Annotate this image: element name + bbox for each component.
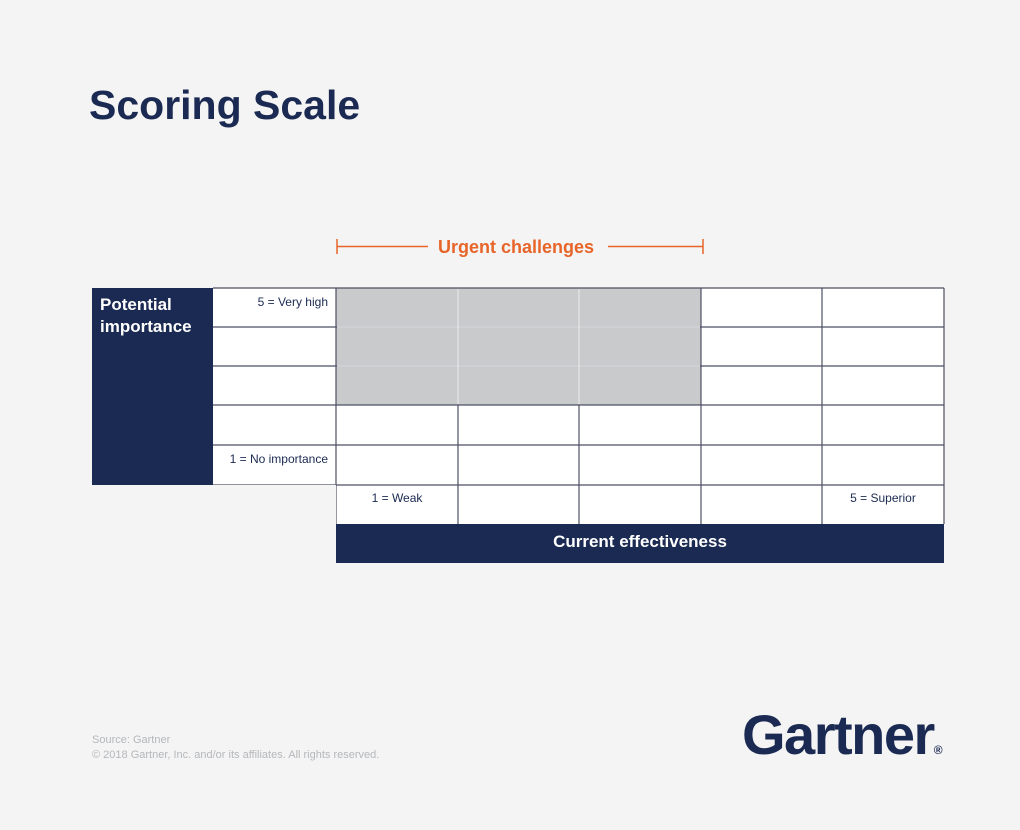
panel: potential importance <box>92 288 213 485</box>
axis labels <box>230 295 916 505</box>
urgent challenges bracket: Urgent challenges <box>438 237 594 257</box>
axis labels: 5 = Very high <box>258 295 328 309</box>
axis labels: 1 = Weak <box>372 491 423 505</box>
panel: potential importance: Potential <box>100 295 172 314</box>
grid cells <box>213 288 944 525</box>
source footer: Source: Gartner <box>92 734 170 746</box>
axis labels: 5 = Superior <box>850 491 916 505</box>
current effectiveness bar <box>336 524 944 563</box>
logo: Gartner: Gartner® <box>742 703 943 766</box>
source footer <box>92 734 379 761</box>
panel: potential importance: importance <box>100 317 192 336</box>
axis labels: 1 = No importance <box>230 452 328 466</box>
source footer: © 2018 Gartner, Inc. and/or its affiliates. All rights reserved. <box>92 749 379 761</box>
scoring grid <box>92 287 945 563</box>
title: Scoring Scale <box>89 82 360 128</box>
current effectiveness bar: Current effectiveness <box>553 532 727 551</box>
